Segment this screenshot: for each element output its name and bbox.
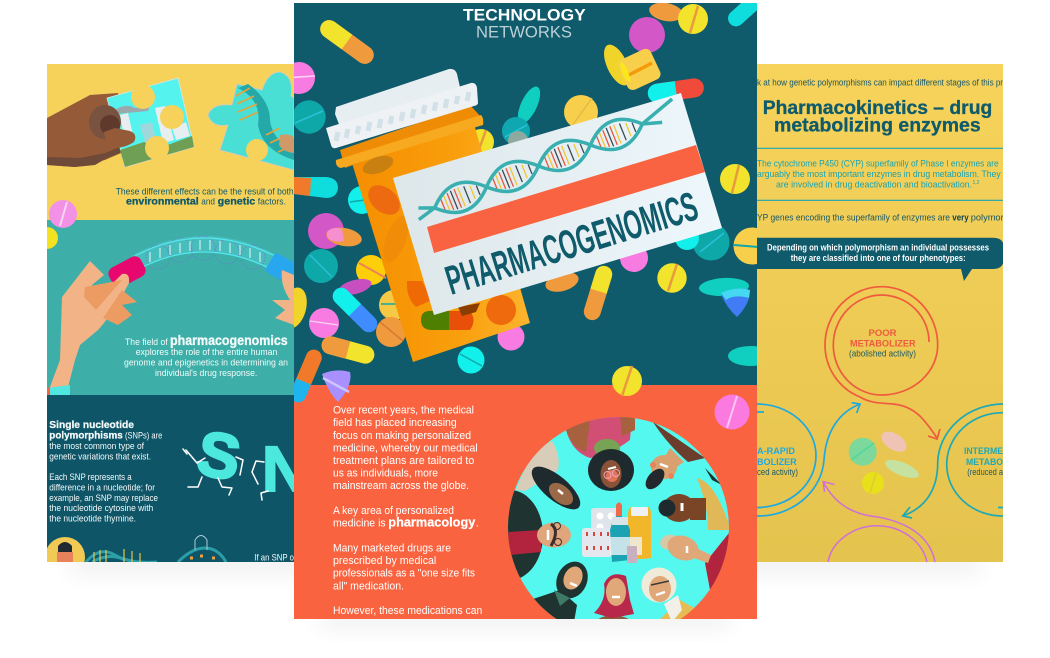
icon: circle of diverse people around medicines [477, 414, 729, 640]
callout: phenotypes speech bubble: Depending on which polymorphism an individual possesses [767, 243, 989, 254]
icon: central pills [849, 427, 921, 494]
text: effects: and [201, 197, 215, 208]
text: SNP definition: polymorphisms [49, 430, 123, 442]
text: effects: genetic [218, 196, 255, 208]
text: effects [116, 188, 294, 207]
text: ultra-rapid metabolizer: BOLIZER [757, 457, 797, 468]
panel shadows [70, 552, 980, 626]
text: cytochrome callout [757, 148, 1003, 200]
text: introduction paragraphs: professionals as a "one size fits [333, 568, 475, 580]
text: ultra-rapid metabolizer: ced activity) [757, 467, 798, 477]
person: right older woman [658, 531, 729, 590]
person: top right man [642, 422, 705, 493]
icon: DNA capsule with hands [47, 236, 301, 396]
text: intermediate metabolizer: METABO [966, 457, 1003, 468]
text: poor metabolizer: (abolished activity) [849, 349, 916, 359]
text: SNP definition [49, 419, 162, 525]
text: introduction paragraphs: pharmacology [388, 514, 476, 530]
logo: Technology Networks: NETWORKS [476, 24, 572, 42]
text: introduction paragraphs: field has placed increasing [333, 417, 457, 429]
person: woman in hijab [530, 556, 594, 622]
heading: pharmacokinetics: Pharmacokinetics – drug [763, 97, 992, 119]
icon: running letters SN: N [262, 433, 308, 505]
text: intermediate metabolizer: INTERME [964, 446, 1003, 457]
text: introduction paragraphs: However, these medications can [333, 605, 482, 617]
text: poor metabolizer: POOR [869, 328, 897, 339]
text: field of pharmacogenomics [124, 333, 288, 379]
text: introduction paragraphs: prescribed by medical [333, 555, 436, 567]
icon: pill bottle [326, 69, 530, 362]
text: SNP definition: the nucleotide thymine. [49, 514, 136, 525]
text: introduction paragraphs: all" medication. [333, 580, 404, 592]
text: field of pharmacogenomics: individual's drug response. [155, 368, 257, 379]
text: introduction paragraphs: medicine, whereby our medical [333, 442, 478, 454]
icon: DNA helix [418, 98, 674, 221]
text: introduction paragraphs: treatment plans are tailored to [333, 455, 474, 467]
orange stripe [427, 145, 705, 253]
text: field of pharmacogenomics: The field of [125, 337, 168, 348]
label title: PHARMACOGENOMICS [440, 183, 703, 304]
icon: scattered pills [277, 0, 774, 405]
hero background [294, 3, 757, 385]
pills inside bottle [360, 152, 516, 330]
text: field of pharmacogenomics: genome and epigenetics in determining an [124, 358, 288, 369]
text: introduction paragraphs: us as individuals, more [333, 467, 438, 479]
icon: ultra-rapid metabolizer spiral arrow [757, 403, 860, 516]
text: introduction paragraphs: Many marketed drugs are [333, 543, 451, 555]
icon: intermediate metabolizer spiral arrow [903, 404, 1003, 518]
text: introduction paragraphs: Over recent years, the medical [333, 405, 474, 417]
icon: normal metabolizer spiral arrow [823, 482, 935, 562]
teal section [47, 220, 294, 396]
heading: pharmacokinetics [763, 97, 992, 137]
text: introduction paragraphs [333, 405, 482, 617]
text: SNP definition: genetic variations that exist. [49, 452, 151, 463]
text: ultra-rapid metabolizer [757, 446, 798, 477]
icon: DNA puzzle piece [208, 72, 294, 170]
callout: phenotypes speech bubble [745, 238, 1004, 281]
person: woman with long dark hair [516, 441, 587, 516]
text: introduction paragraphs: focus on making personalized [333, 430, 471, 442]
text: SNP definition: Each SNP represents a [49, 472, 132, 483]
text: field of pharmacogenomics: pharmacogenomics [170, 333, 288, 348]
text: SNP definition: example, an SNP may replace [49, 493, 158, 504]
icon: pink pill [49, 200, 77, 228]
text: poor metabolizer: METABOLIZER [850, 339, 916, 350]
text: effects: environmental [126, 196, 199, 208]
text: introduction paragraphs: mainstream across the globe. [333, 480, 469, 492]
person: right man [658, 468, 729, 530]
text: SNP definition: the nucleotide cytosine with [49, 503, 153, 514]
text: field of pharmacogenomics: explores the role of the entire human [136, 347, 277, 358]
icon: yellow pill [47, 227, 58, 249]
text: intermediate metabolizer [964, 446, 1003, 477]
person: left bald man [477, 490, 571, 580]
text: intermediate metabolizer: (reduced a [967, 467, 1003, 477]
person: top woman [566, 414, 635, 491]
text: introduction paragraphs: medicine is [333, 518, 386, 530]
text: introduction paragraphs: A key area of personalized [333, 505, 454, 517]
text: cytochrome callout: The cytochrome P450 (CYP) superfamily of Phase I enzymes are [757, 159, 999, 170]
panel: centre infographic page [294, 3, 757, 619]
text: SNP definition: difference in a nucleotide; for [49, 482, 155, 493]
text: intro: k at how genetic polymorphisms can impact different stages of this pr [757, 78, 1003, 89]
text: SNP definition: Single nucleotide [49, 419, 134, 431]
icon: running letters SN [182, 432, 294, 501]
text: CYP genes: YP genes encoding the superfamily of enzymes are [757, 213, 950, 224]
text: if an SNP: If an SNP o [254, 553, 294, 564]
logo: Technology Networks [463, 9, 586, 38]
text: effects: factors. [258, 197, 286, 208]
text: introduction paragraphs: . [476, 518, 479, 530]
heading: pharmacokinetics: metabolizing enzymes [774, 115, 981, 137]
text: ultra-rapid metabolizer: A-RAPID [757, 446, 795, 457]
logo: Technology Networks: TECHNOLOGY [463, 6, 586, 25]
text: cytochrome callout: arguably the most important enzymes in drug metabolism. They [757, 169, 1001, 180]
text: CYP genes: very [952, 213, 969, 224]
text: effects: These different effects can be the result of both [116, 186, 294, 197]
icon: hand holding environment puzzle piece [47, 78, 194, 167]
icon: poor metabolizer spiral arrow [825, 287, 940, 439]
person: bottom right elder [642, 568, 698, 632]
icon: running letters SN: S [192, 418, 246, 494]
text: poor metabolizer [849, 328, 916, 359]
medicines group [582, 502, 651, 563]
person: bottom woman with red hair [594, 574, 634, 640]
panel: right infographic page [745, 64, 1004, 562]
callout: phenotypes speech bubble: they are classified into one of four phenotypes: [791, 253, 966, 264]
yellow section [47, 64, 294, 221]
text: cytochrome callout: are involved in drug deactivation and bioactivation. [776, 179, 972, 190]
text: SNP definition: the most common type of [49, 441, 144, 452]
icon: pink pill on orange [714, 394, 750, 430]
text: CYP genes: polymor [971, 213, 1004, 224]
icon: bottle label [393, 93, 722, 315]
icon: portrait and DNA strands [47, 535, 228, 562]
panel: left infographic page [47, 64, 294, 562]
text: cytochrome callout: 1,2 [972, 180, 980, 186]
text: SNP definition: (SNPs) are [125, 431, 162, 442]
orange text section background [294, 385, 757, 619]
dark section [47, 395, 294, 562]
